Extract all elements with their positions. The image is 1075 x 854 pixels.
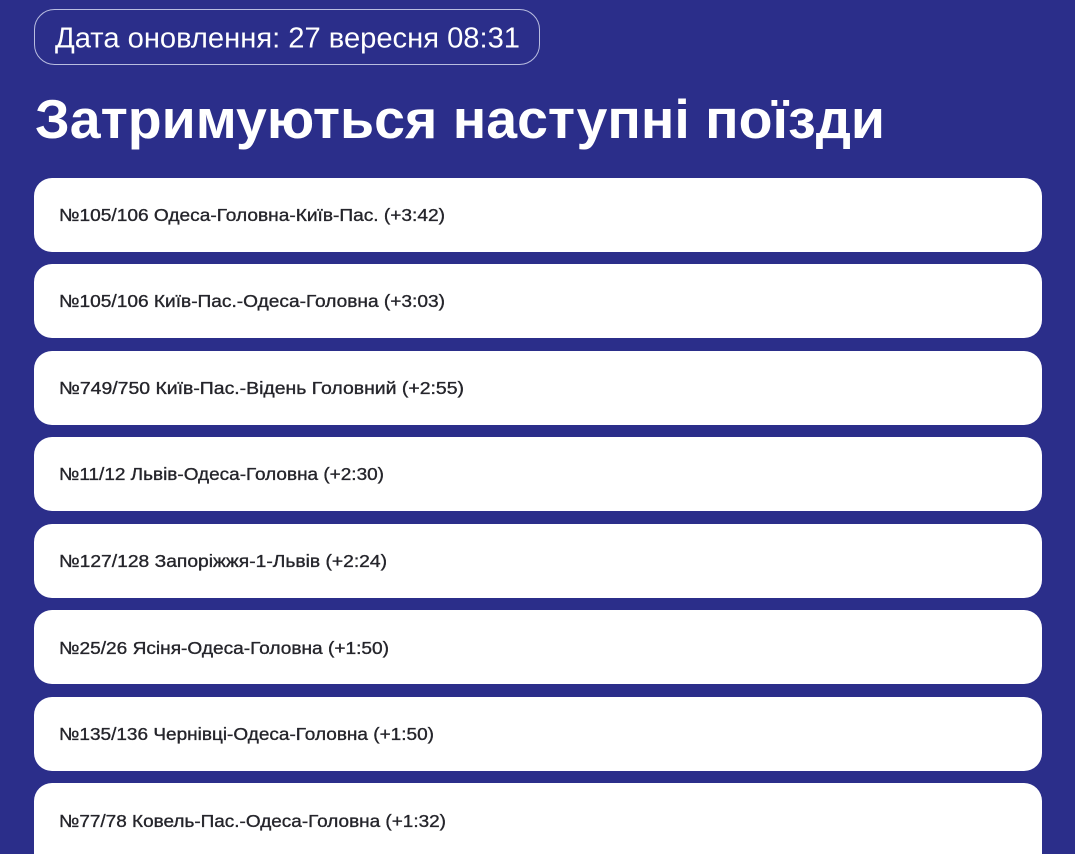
train row 6: №25/26 Ясіня-Одеса-Головна (+1:50): [59, 638, 389, 658]
train row 2: [34, 264, 1042, 338]
title: Затримуються наступні поїзди: [35, 88, 885, 150]
train row 8: [34, 783, 1042, 854]
train row 2: №105/106 Київ-Пас.-Одеса-Головна (+3:03): [59, 291, 445, 311]
update date pill: [34, 10, 540, 64]
train row 1: [34, 178, 1042, 252]
train row 5: [34, 524, 1042, 598]
train row 5: №127/128 Запоріжжя-1-Львів (+2:24): [59, 551, 387, 571]
train row 8: №77/78 Ковель-Пас.-Одеса-Головна (+1:32): [59, 811, 446, 831]
train row 3: [34, 351, 1042, 425]
train row 4: №11/12 Львів-Одеса-Головна (+2:30): [59, 464, 384, 484]
train row 6: [34, 610, 1042, 684]
train row 7: №135/136 Чернівці-Одеса-Головна (+1:50): [59, 724, 434, 744]
train row 3: №749/750 Київ-Пас.-Відень Головний (+2:55): [59, 378, 464, 398]
train row 7: [34, 697, 1042, 771]
train row 4: [34, 437, 1042, 511]
train list: [34, 178, 1042, 854]
update date pill: Дата оновлення: 27 вересня 08:31: [55, 22, 520, 54]
train row 1: №105/106 Одеса-Головна-Київ-Пас. (+3:42): [59, 205, 445, 225]
